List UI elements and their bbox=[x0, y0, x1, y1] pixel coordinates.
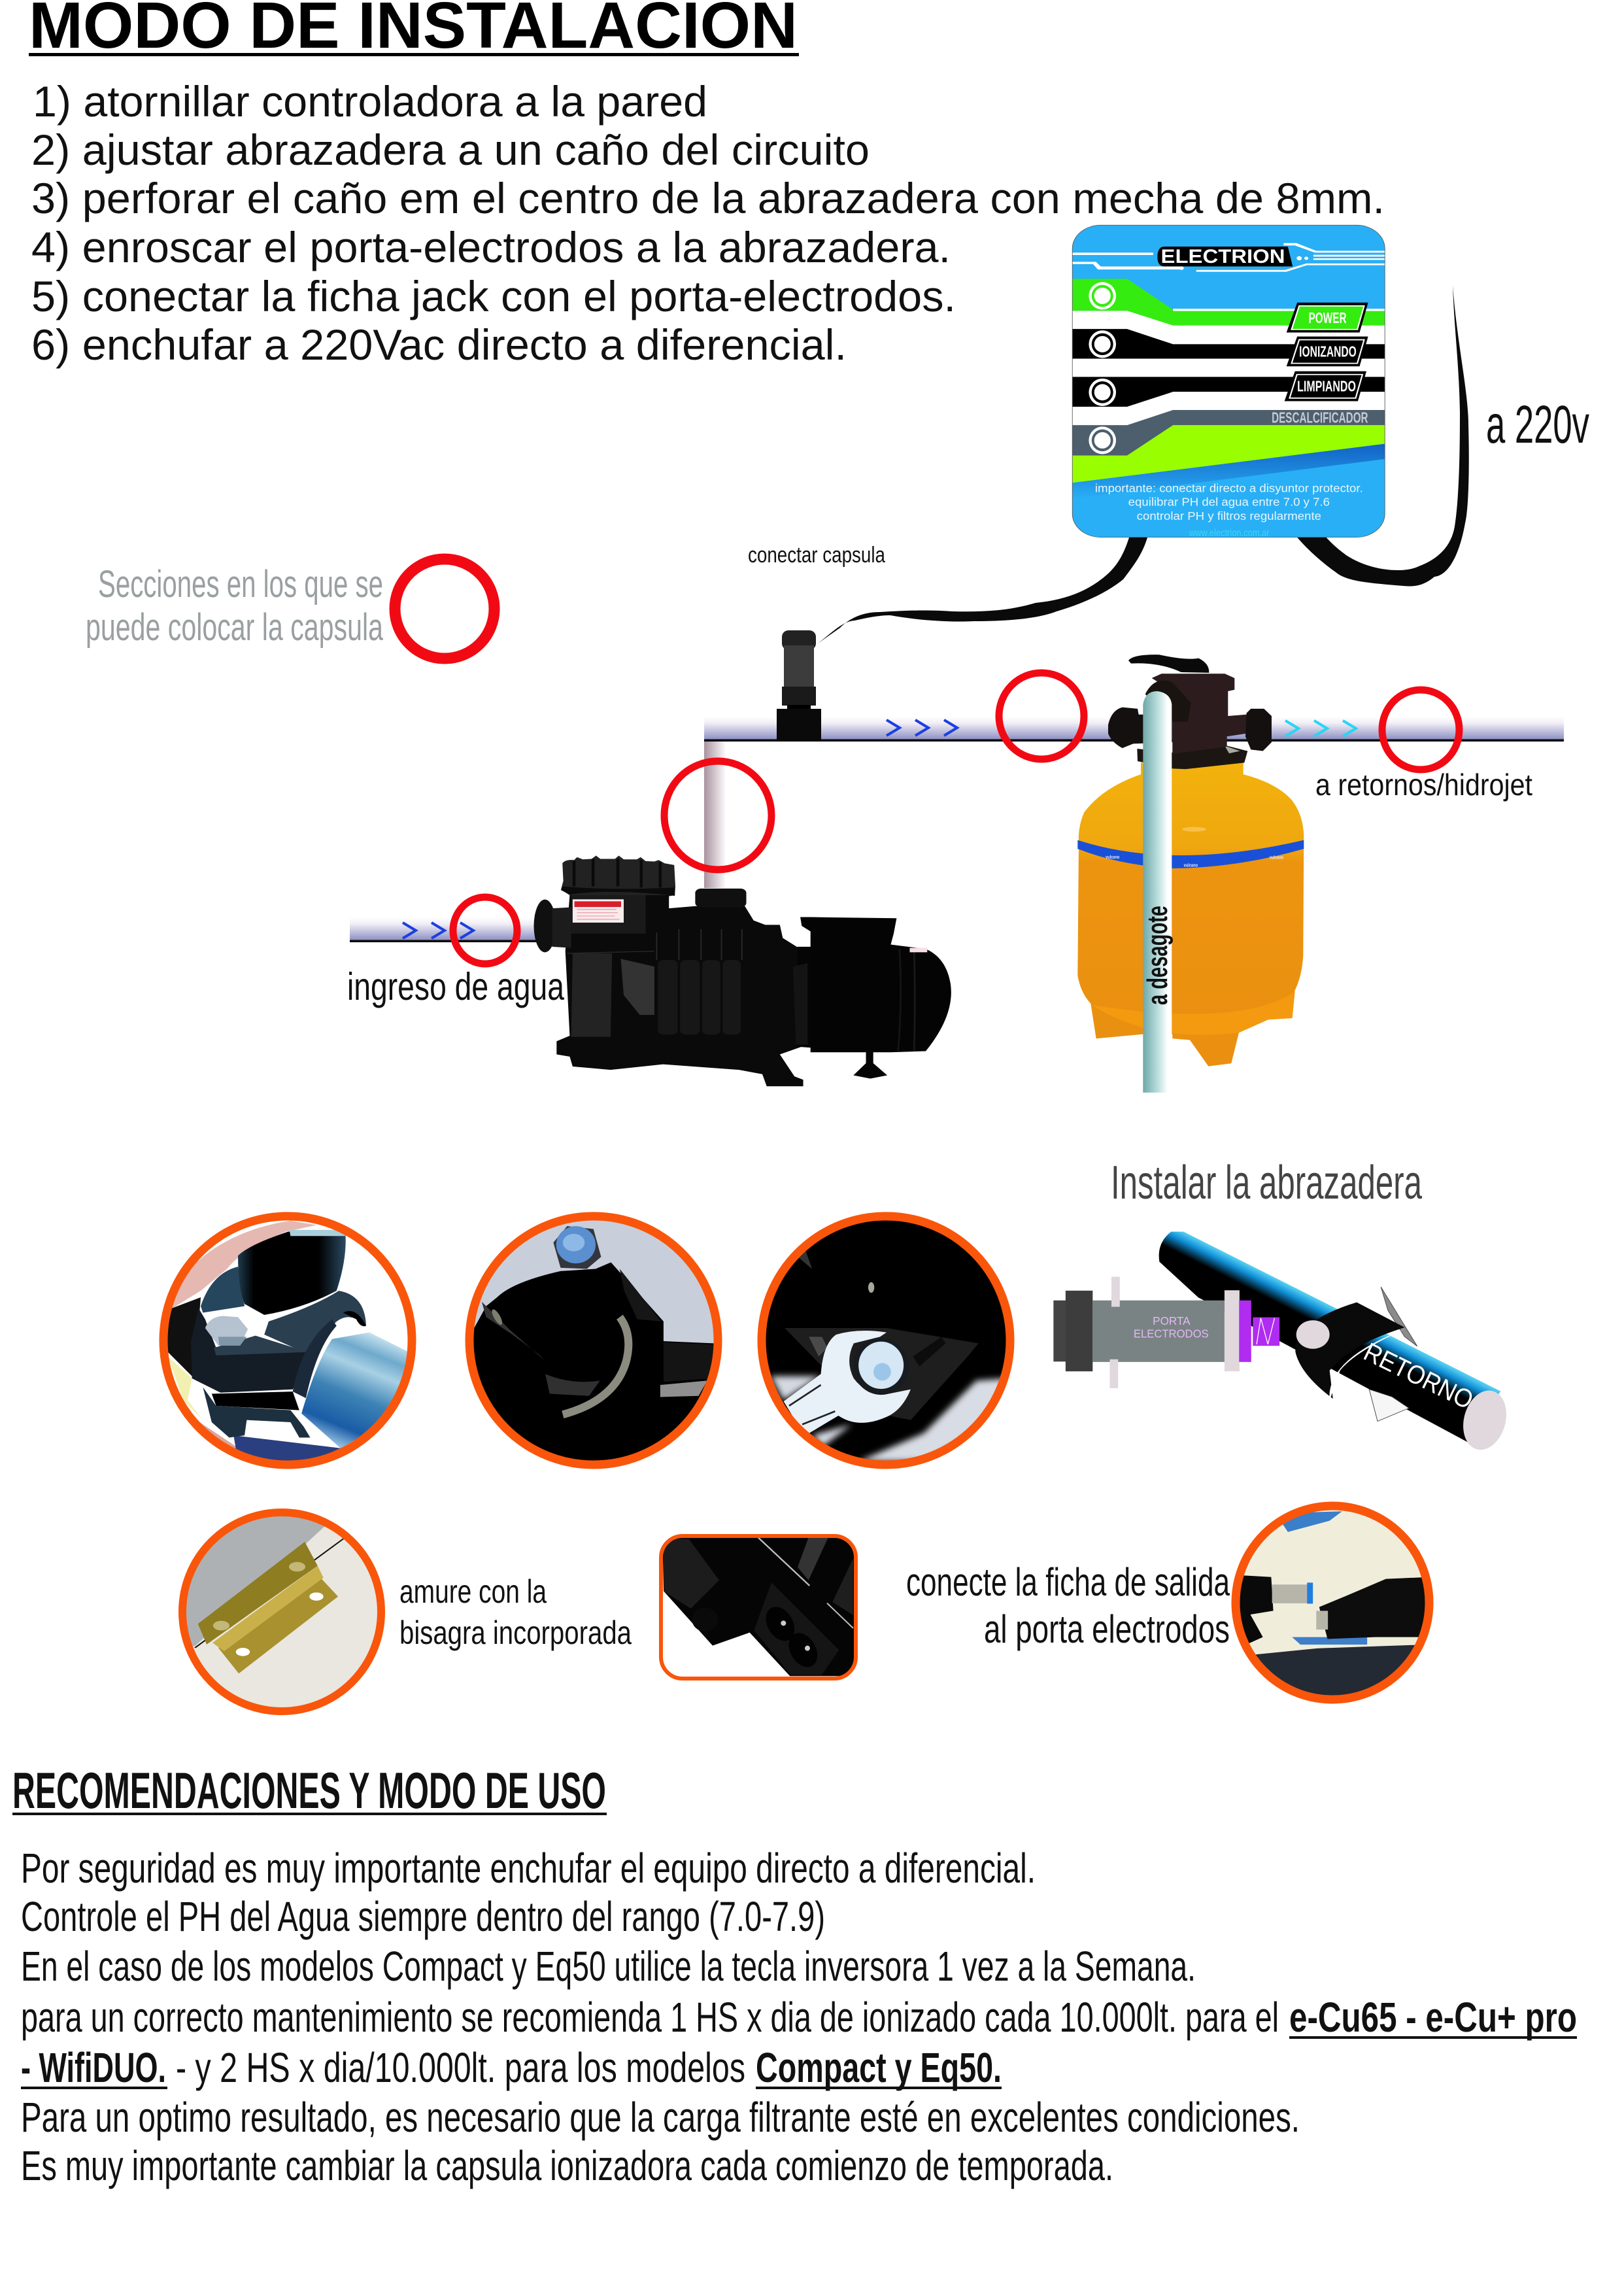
installation steps: 5) conectar la ficha jack con el porta-electrodos. bbox=[31, 272, 956, 320]
controller outline bbox=[1072, 225, 1385, 537]
label: conecte la ficha: conecte la ficha de salida bbox=[906, 1560, 1230, 1604]
recommendations text: - WifiDUO. bbox=[21, 2044, 166, 2091]
recommendations text: Controle el PH del Agua siempre dentro del rango (7.0-7.9) bbox=[21, 1893, 825, 1940]
photo: clamp opening bbox=[464, 1210, 727, 1488]
panel warning text: importante: conectar directo a disyuntor protector. bbox=[1095, 482, 1363, 495]
recommendations text: Por seguridad es muy importante enchufar el equipo directo a diferencial. bbox=[21, 1845, 1036, 1892]
label: retorno: RETORNO bbox=[1359, 1338, 1478, 1415]
panel warning text bbox=[1095, 482, 1363, 522]
ionizando button: IONIZANDO bbox=[1299, 343, 1357, 360]
water pipes bbox=[350, 717, 1564, 942]
tank brand marks: vulcano bbox=[1106, 855, 1119, 860]
legend text: Secciones en los que se bbox=[98, 563, 383, 606]
power cable to 220v bbox=[1294, 285, 1469, 586]
pipe end cap bbox=[1457, 1387, 1512, 1454]
photo: hinge bbox=[177, 1506, 394, 1718]
holder label: ELECTRODOS bbox=[1134, 1327, 1209, 1340]
label: conectar capsula: conectar capsula bbox=[748, 543, 885, 568]
ionizando button bbox=[1287, 337, 1368, 366]
electrode holder bbox=[1053, 1277, 1279, 1388]
label: a desagote: a desagote bbox=[1142, 906, 1174, 1005]
capsule bbox=[777, 630, 821, 740]
installation steps: 6) enchufar a 220Vac directo a diferencial. bbox=[31, 320, 847, 369]
power button: POWER bbox=[1309, 309, 1347, 326]
label: ingreso de agua: ingreso de agua bbox=[347, 965, 564, 1008]
installation steps: 3) perforar el caño em el centro de la abrazadera con mecha de 8mm. bbox=[31, 174, 1385, 222]
tank brand marks: vulcano bbox=[1270, 855, 1283, 861]
recommendations text: En el caso de los modelos Compact y Eq50 utilice la tecla inversora 1 vez a la Semana. bbox=[21, 1943, 1196, 1990]
installation steps: 4) enroscar el porta-electrodos a la abrazadera. bbox=[31, 223, 951, 271]
recommendations text: Es muy importante cambiar la capsula ionizadora cada comienzo de temporada. bbox=[21, 2142, 1113, 2189]
holder label: PORTA bbox=[1153, 1315, 1191, 1327]
limpiando button: LIMPIANDO bbox=[1297, 377, 1356, 395]
label: amure con la bisagra: amure con la bbox=[399, 1573, 547, 1610]
tank brand marks: vulcano bbox=[1184, 863, 1198, 868]
panel warning text: equilibrar PH del agua entre 7.0 y 7.6 bbox=[1128, 496, 1330, 509]
pump bbox=[534, 855, 951, 1086]
label: instalar la abrazadera: Instalar la abrazadera bbox=[1111, 1157, 1423, 1209]
controller panel bbox=[1072, 225, 1385, 538]
installation steps: 2) ajustar abrazadera a un caño del circuito bbox=[31, 126, 870, 174]
descalcificador label: DESCALCIFICADOR bbox=[1272, 409, 1368, 426]
limpiando button bbox=[1285, 371, 1366, 401]
indicator rings bbox=[1089, 282, 1116, 454]
label: conecte la ficha: al porta electrodos bbox=[984, 1607, 1230, 1651]
recommendations text: - y 2 HS x dia/10.000lt. para los modelos bbox=[176, 2044, 745, 2091]
return pipe bbox=[1159, 1232, 1500, 1442]
power button bbox=[1287, 303, 1368, 332]
heading: recomendaciones: RECOMENDACIONES Y MODO DE USO bbox=[12, 1762, 606, 1819]
capsule cable bbox=[818, 537, 1147, 643]
installation steps: 1) atornillar controladora a la pared bbox=[33, 77, 707, 126]
recommendations text bbox=[21, 1845, 1577, 2189]
label: conecte la ficha bbox=[906, 1560, 1230, 1651]
clamp diagram bbox=[1053, 1232, 1512, 1454]
heading: recomendaciones bbox=[12, 1762, 607, 1819]
filter tank bbox=[1077, 655, 1304, 1093]
label: amure con la bisagra: bisagra incorporada bbox=[399, 1614, 632, 1651]
installation steps bbox=[31, 77, 1385, 369]
clamp saddle bbox=[1295, 1303, 1405, 1399]
drain pipe bbox=[1143, 691, 1172, 1093]
legend text bbox=[86, 563, 384, 649]
capsule position markers bbox=[395, 559, 1459, 964]
photo: clamp on blue pipe bbox=[157, 1210, 420, 1473]
clamp fins bbox=[1369, 1287, 1417, 1422]
website: www.electrion.com.ar bbox=[1189, 526, 1270, 538]
photo: jack plug bbox=[1225, 1498, 1442, 1701]
clamp plug bbox=[1296, 1320, 1330, 1349]
filter valve bbox=[1108, 655, 1272, 769]
photo: power socket bbox=[658, 1532, 858, 1680]
photo: wrench on bolt bbox=[755, 1210, 1018, 1473]
flow arrows bbox=[403, 720, 1356, 938]
holder label bbox=[1134, 1315, 1209, 1340]
label: a retornos: a retornos/hidrojet bbox=[1315, 768, 1532, 802]
legend text: puede colocar la capsula bbox=[86, 606, 384, 649]
brand logo: ELECTRION bbox=[1161, 246, 1285, 267]
panel warning text: controlar PH y filtros regularmente bbox=[1137, 510, 1321, 522]
label: amure con la bisagra bbox=[399, 1573, 632, 1651]
tank brand marks bbox=[1106, 855, 1283, 868]
recommendations text: Compact y Eq50. bbox=[756, 2044, 1002, 2091]
